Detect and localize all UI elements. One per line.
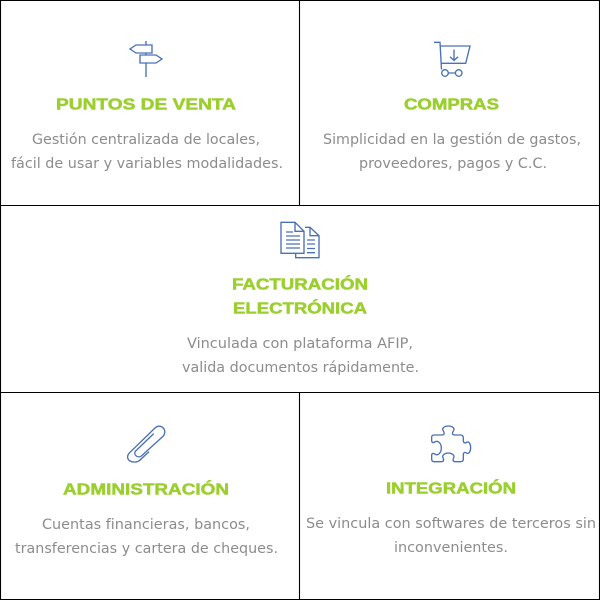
- heading: administración: ADMINISTRACIÓN: [63, 480, 229, 498]
- heading: facturación electrónica: FACTURACIÓN: [232, 274, 368, 294]
- text: compras description: Simplicidad en la gestión de gastos,: [323, 132, 581, 148]
- icon: signpost: [130, 41, 162, 77]
- icon: puzzle piece: [432, 426, 471, 462]
- text: integración description: Se vincula con softwares de terceros sin: [306, 516, 596, 532]
- icon: shopping cart: [434, 42, 470, 76]
- text: facturación description: valida documentos rápidamente.: [182, 360, 419, 376]
- panel: integración: [306, 426, 596, 556]
- heading: facturación electrónica: ELECTRÓNICA: [233, 298, 368, 318]
- panel: puntos de venta: [11, 41, 283, 172]
- icon: documents: [281, 222, 319, 258]
- text: compras description: [323, 132, 581, 172]
- text: puntos de venta description: fácil de usar y variables modalidades.: [11, 156, 283, 172]
- text: administración description: [15, 517, 278, 557]
- text: puntos de venta description: [11, 132, 283, 172]
- text: facturación description: Vinculada con plataforma AFIP,: [187, 336, 413, 352]
- text: administración description: Cuentas financieras, bancos,: [42, 517, 250, 533]
- panel: facturación electrónica: [182, 222, 419, 376]
- text: facturación description: [182, 336, 419, 376]
- text: integración description: inconvenientes.: [394, 540, 508, 556]
- heading: facturación electrónica: [232, 274, 368, 318]
- heading: puntos de venta: PUNTOS DE VENTA: [56, 96, 237, 114]
- heading: integración: INTEGRACIÓN: [386, 478, 516, 498]
- text: integración description: [306, 516, 596, 556]
- text: compras description: proveedores, pagos y C.C.: [359, 156, 547, 172]
- heading: compras: COMPRAS: [404, 96, 499, 114]
- panel: administración: [15, 426, 278, 557]
- icon: paperclip: [128, 426, 165, 462]
- panel: compras: [323, 42, 581, 172]
- text: puntos de venta description: Gestión centralizada de locales,: [32, 132, 260, 148]
- text: administración description: transferencias y cartera de cheques.: [15, 541, 278, 557]
